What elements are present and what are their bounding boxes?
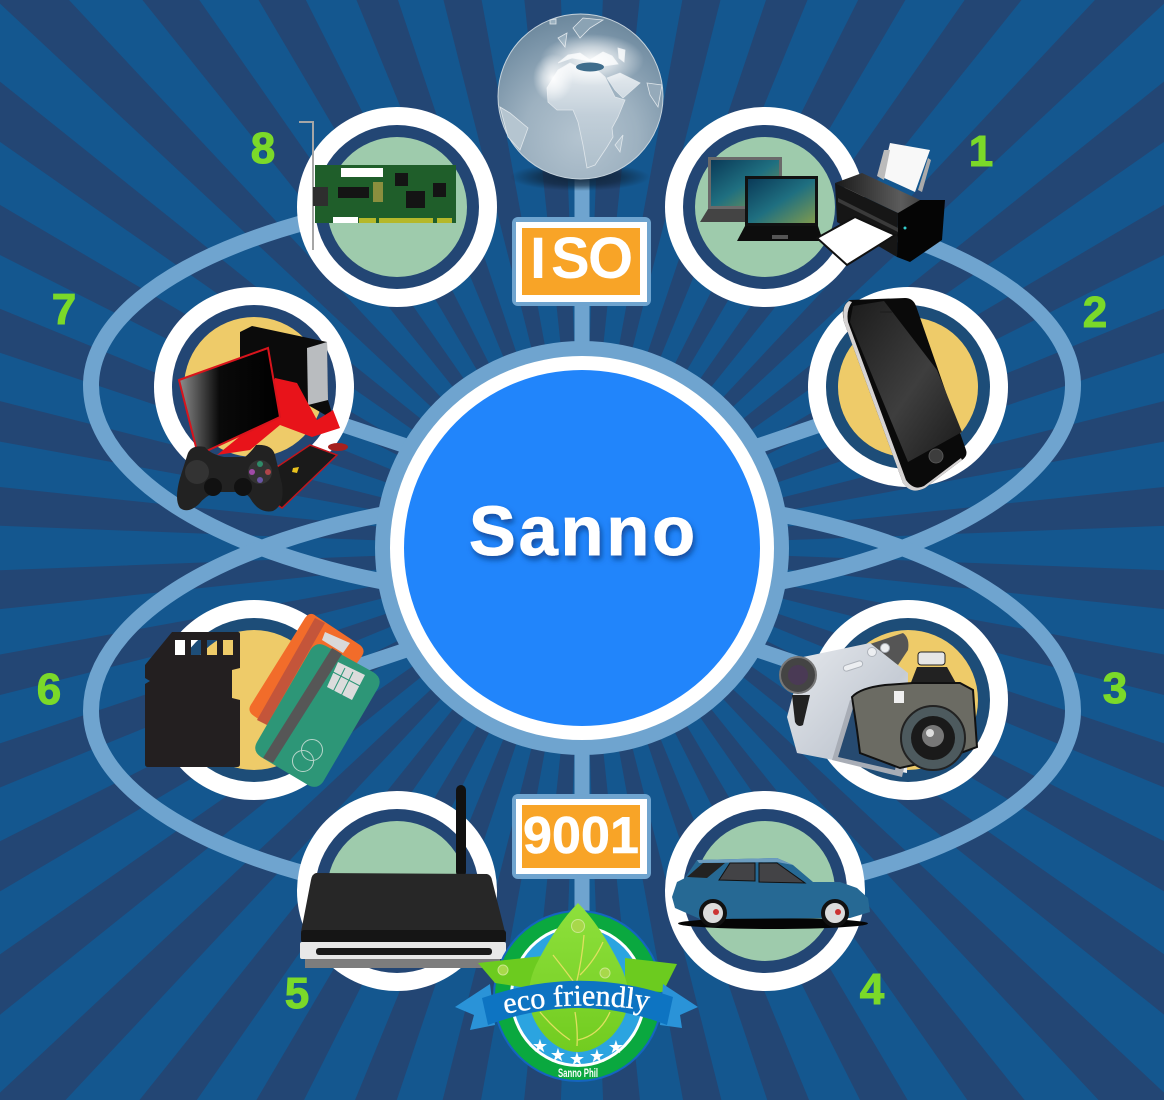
number labels: 1 xyxy=(969,127,993,176)
icon: red stand xyxy=(217,378,340,455)
stars: ★ xyxy=(532,1036,548,1056)
circle 4: car xyxy=(665,791,870,991)
number labels: 7 xyxy=(52,285,76,334)
centre leaf xyxy=(529,903,628,1052)
circle 2: smartphone xyxy=(808,287,1008,491)
number labels: 2 xyxy=(1083,288,1107,337)
ribbon tails xyxy=(455,984,698,1030)
badge caption: Sanno Phil xyxy=(558,1066,598,1080)
icon: monitor xyxy=(179,348,280,455)
number labels: 8 xyxy=(251,124,275,173)
icon: expansion card xyxy=(299,122,456,250)
number labels: 6 xyxy=(37,665,61,714)
stars: ★ xyxy=(550,1045,566,1065)
eco friendly badge xyxy=(455,903,698,1082)
stars: ★ xyxy=(608,1037,624,1057)
icon: camera xyxy=(852,652,977,770)
ribbon xyxy=(482,981,673,1025)
stars: ★ xyxy=(569,1049,585,1069)
stars: ★ xyxy=(589,1046,605,1066)
side leaves xyxy=(478,956,677,992)
badge: ISO xyxy=(512,217,651,306)
icon: game controller xyxy=(177,445,283,511)
circle 7: gaming computer xyxy=(154,287,354,511)
badge: 9001 xyxy=(512,794,651,879)
icon: printer xyxy=(817,143,945,265)
icon: camcorder xyxy=(780,633,915,777)
icon: front laptop xyxy=(737,176,823,241)
connector: lower loop xyxy=(91,496,1073,875)
water drops xyxy=(498,920,610,978)
icon: orange card xyxy=(249,614,364,725)
badge: 9001: 9001 xyxy=(523,807,639,865)
circle 1: computers and printer xyxy=(665,107,945,307)
connector: spokes xyxy=(254,170,908,930)
connector: upper loop xyxy=(91,221,1073,600)
number labels: 4 xyxy=(860,965,885,1014)
icon: car xyxy=(672,858,870,929)
leaf veins xyxy=(540,935,610,1046)
circle 3: camcorder and camera xyxy=(780,600,1008,800)
icon: SD card xyxy=(145,632,240,767)
icon: back laptop xyxy=(700,157,790,222)
circle 5: router xyxy=(297,785,506,991)
icon: green card xyxy=(255,644,380,787)
central hub xyxy=(375,341,789,755)
badge: ISO: ISO xyxy=(530,226,633,291)
stars xyxy=(532,1036,624,1069)
circle 8: network card xyxy=(297,107,497,307)
number labels: 5 xyxy=(285,969,309,1018)
ribbon label: eco friendly xyxy=(504,984,650,1016)
icon: router xyxy=(300,785,506,968)
circle 6: memory card and bank cards xyxy=(145,600,380,800)
number labels xyxy=(37,124,1127,1018)
icon: phone xyxy=(843,298,966,491)
icon: tower xyxy=(240,326,334,420)
number labels: 3 xyxy=(1103,664,1127,713)
globe xyxy=(498,14,663,191)
icon: keyboard xyxy=(270,443,348,508)
hub title: Sanno xyxy=(469,492,695,570)
